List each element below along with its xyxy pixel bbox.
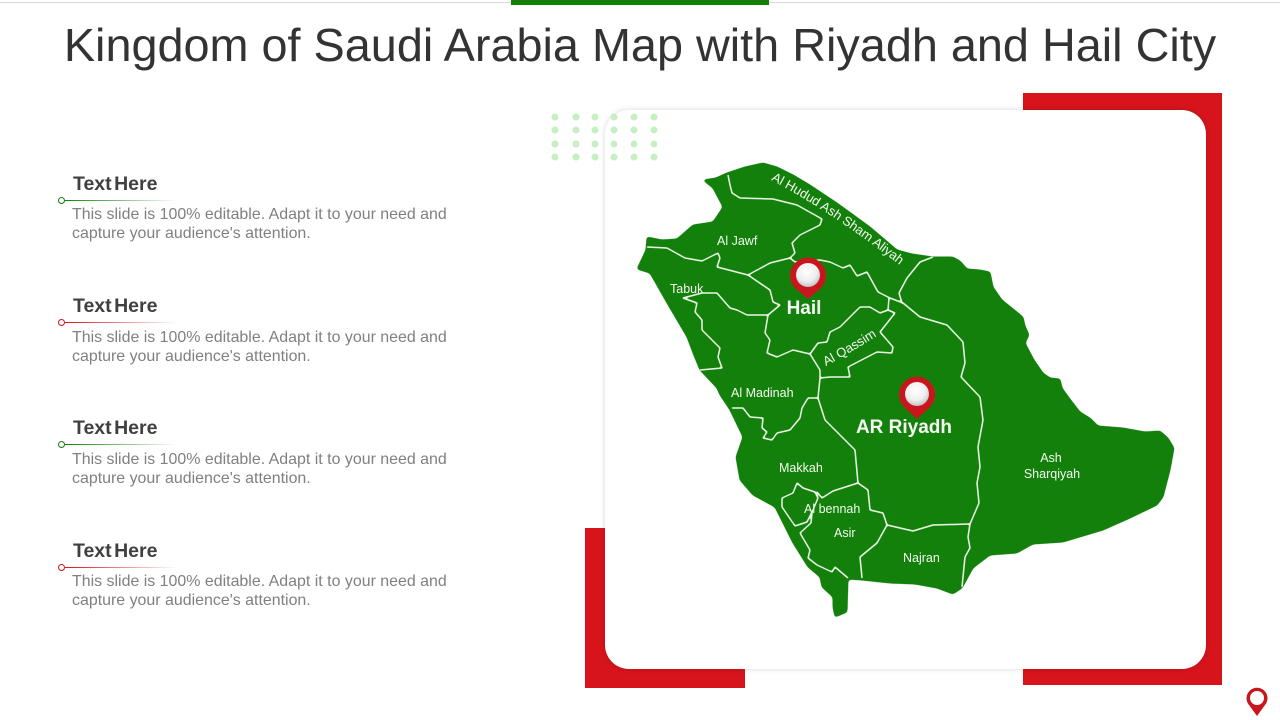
label: Al Qassim: Al Qassim	[824, 331, 876, 366]
country outline	[637, 163, 1174, 617]
label: Makkah: Makkah	[779, 461, 823, 475]
item 1 body	[72, 206, 447, 242]
top rule	[0, 2, 1280, 3]
item 2 heading: Text Here	[73, 295, 157, 317]
city label: AR Riyadh: AR Riyadh	[856, 417, 952, 438]
red frame block left	[585, 528, 745, 688]
label: Tabuk: Tabuk	[670, 282, 704, 296]
text item 2	[58, 295, 447, 365]
item 1 body: capture your audience's attention.	[72, 225, 311, 242]
item 3 body: capture your audience's attention.	[72, 470, 311, 487]
label: Ash Sharqiyah: Ash	[1040, 451, 1062, 465]
text item 1	[58, 173, 447, 242]
item 3 heading: Text Here	[73, 417, 157, 439]
item 2 body: This slide is 100% editable. Adapt it to your need and	[72, 329, 447, 346]
title: Kingdom of Saudi Arabia Map with Riyadh and Hail City	[64, 19, 1216, 71]
top green accent bar	[511, 0, 769, 5]
label: Asir: Asir	[834, 526, 856, 540]
label: Najran: Najran	[903, 551, 940, 565]
white map card	[605, 110, 1206, 669]
item 1 heading: Text Here	[73, 173, 157, 195]
red frame block right	[1023, 93, 1222, 685]
text item 3	[58, 417, 447, 487]
region boundaries	[647, 175, 983, 587]
item 4 body: capture your audience's attention.	[72, 592, 311, 609]
item 4 body	[72, 573, 447, 609]
label: Al bennah: Al bennah	[804, 502, 860, 516]
dot grid	[552, 114, 658, 160]
region labels	[670, 174, 1080, 565]
label: Ash Sharqiyah: Sharqiyah	[1024, 467, 1080, 481]
item 2 body: capture your audience's attention.	[72, 348, 311, 365]
item 4 body: This slide is 100% editable. Adapt it to your need and	[72, 573, 447, 590]
text item 4	[58, 540, 447, 609]
label: Al Hudud Ash Sham Aliyah: Al Hudud Ash Sham Aliyah	[770, 174, 903, 264]
item 2 body	[72, 329, 447, 365]
item 1 body: This slide is 100% editable. Adapt it to your need and	[72, 206, 447, 223]
item 3 body: This slide is 100% editable. Adapt it to your need and	[72, 451, 447, 468]
city label: Hail: Hail	[787, 298, 821, 319]
pin: AR Riyadh	[899, 377, 935, 419]
label: Al Madinah: Al Madinah	[731, 386, 794, 400]
icon: corner map pin	[1247, 688, 1268, 716]
item 3 body	[72, 451, 447, 487]
pin: Hail	[790, 258, 826, 299]
item 4 heading: Text Here	[73, 540, 157, 562]
label: Al Jawf: Al Jawf	[717, 234, 758, 248]
